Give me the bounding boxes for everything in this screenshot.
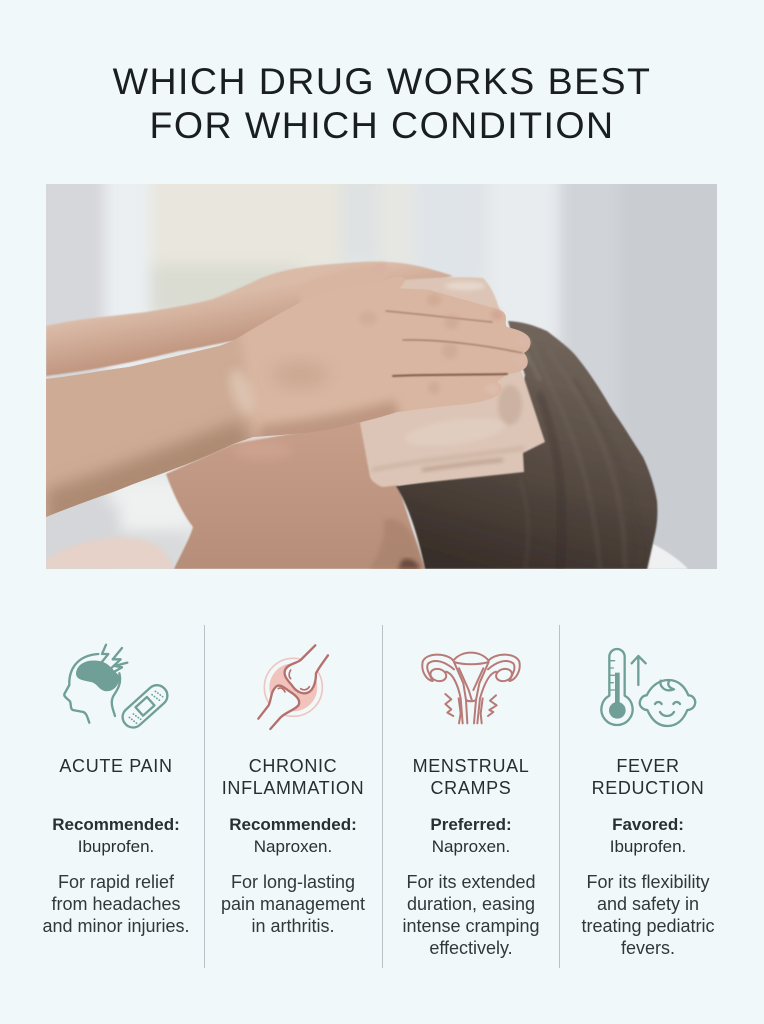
description: fever reduction: [581, 872, 715, 958]
description: menstrual cramps: [402, 872, 540, 958]
ear: [370, 519, 423, 569]
description: fever reduction: fevers.: [621, 938, 675, 958]
wrist highlight: [228, 369, 255, 416]
recommendation: ibuprofen: Recommended:: [52, 815, 180, 834]
heading: acute pain: ACUTE PAIN: [59, 756, 173, 776]
back nail: [370, 262, 388, 276]
towel shading: [372, 282, 524, 470]
photo: hands holding a towel on a head: [46, 184, 717, 569]
description: acute pain: and minor injuries.: [42, 916, 190, 936]
icon: inflamed joint: [257, 644, 330, 730]
heading: menstrual cramps: CRAMPS: [431, 778, 511, 798]
panel: fever reduction: [581, 648, 715, 958]
hand mid shading: [278, 362, 322, 386]
title: FOR WHICH CONDITION: [149, 104, 614, 146]
recommendation: ibuprofen favored: Favored:: [612, 815, 684, 834]
heading: chronic inflammation: CHRONIC: [249, 756, 337, 776]
panel: acute pain: [42, 644, 190, 936]
icon: thermometer and baby: [600, 648, 696, 728]
arm underside shadow: [46, 418, 254, 517]
description: menstrual cramps: effectively.: [429, 938, 513, 958]
heading: chronic inflammation: INFLAMMATION: [222, 778, 364, 798]
heading: fever reduction: FEVER: [616, 756, 680, 776]
description: acute pain: from headaches: [51, 894, 181, 914]
recommendation: ibuprofen favored: [610, 815, 686, 856]
divider: columns 2 and 3: [382, 625, 383, 968]
recommendation: naproxen: Recommended:: [229, 815, 357, 834]
heading: chronic inflammation: [222, 756, 364, 798]
description: fever reduction: treating pediatric: [581, 916, 715, 936]
arm tone: [46, 338, 250, 517]
front arm and hand: [46, 280, 530, 517]
hair strands: [524, 352, 626, 569]
divider: columns 1 and 2: [204, 625, 205, 968]
finger shadows: [386, 311, 522, 376]
title: WHICH DRUG WORKS BEST: [113, 60, 651, 102]
icon: uterus with cramps: [421, 652, 521, 724]
recommendation: naproxen preferred: [430, 815, 512, 856]
back arm and hand: [46, 262, 453, 376]
description: acute pain: For rapid relief: [58, 872, 174, 892]
title: [112, 60, 651, 146]
panel: chronic inflammation: [221, 644, 365, 936]
description: menstrual cramps: intense cramping: [402, 916, 540, 936]
description: fever reduction: and safety in: [597, 894, 699, 914]
description: chronic inflammation: [221, 872, 365, 936]
description: chronic inflammation: pain management: [221, 894, 365, 914]
heading: fever reduction: REDUCTION: [592, 778, 704, 798]
blanket: [46, 538, 174, 569]
face and neck: [166, 420, 425, 569]
description: menstrual cramps: For its extended: [406, 872, 536, 892]
recommendation: naproxen preferred: Preferred:: [430, 815, 512, 834]
recommendation: naproxen: Naproxen.: [254, 837, 332, 856]
hand underside shade: [256, 399, 400, 437]
description: chronic inflammation: in arthritis.: [251, 916, 335, 936]
nails and knuckles: [359, 294, 530, 395]
recommendation: ibuprofen: Ibuprofen.: [78, 837, 154, 856]
panel: menstrual cramps: [402, 652, 540, 958]
recommendation: naproxen preferred: Naproxen.: [432, 837, 510, 856]
hair: [396, 321, 657, 569]
background: [106, 259, 525, 569]
recommendation: naproxen: [229, 815, 357, 856]
recommendation: ibuprofen: [52, 815, 180, 856]
description: chronic inflammation: For long-lasting: [231, 872, 355, 892]
heading: menstrual cramps: [413, 756, 529, 798]
description: acute pain: [42, 872, 190, 936]
icon: head with lightning and bandage: [63, 644, 168, 729]
divider: columns 3 and 4: [559, 625, 560, 968]
description: fever reduction: For its flexibility: [586, 872, 710, 892]
heading: fever reduction: [592, 756, 704, 798]
pillow: [648, 544, 688, 569]
recommendation: ibuprofen favored: Ibuprofen.: [610, 837, 686, 856]
towel: [360, 277, 545, 487]
heading: menstrual cramps: MENSTRUAL: [413, 756, 529, 776]
description: menstrual cramps: duration, easing: [407, 894, 535, 914]
